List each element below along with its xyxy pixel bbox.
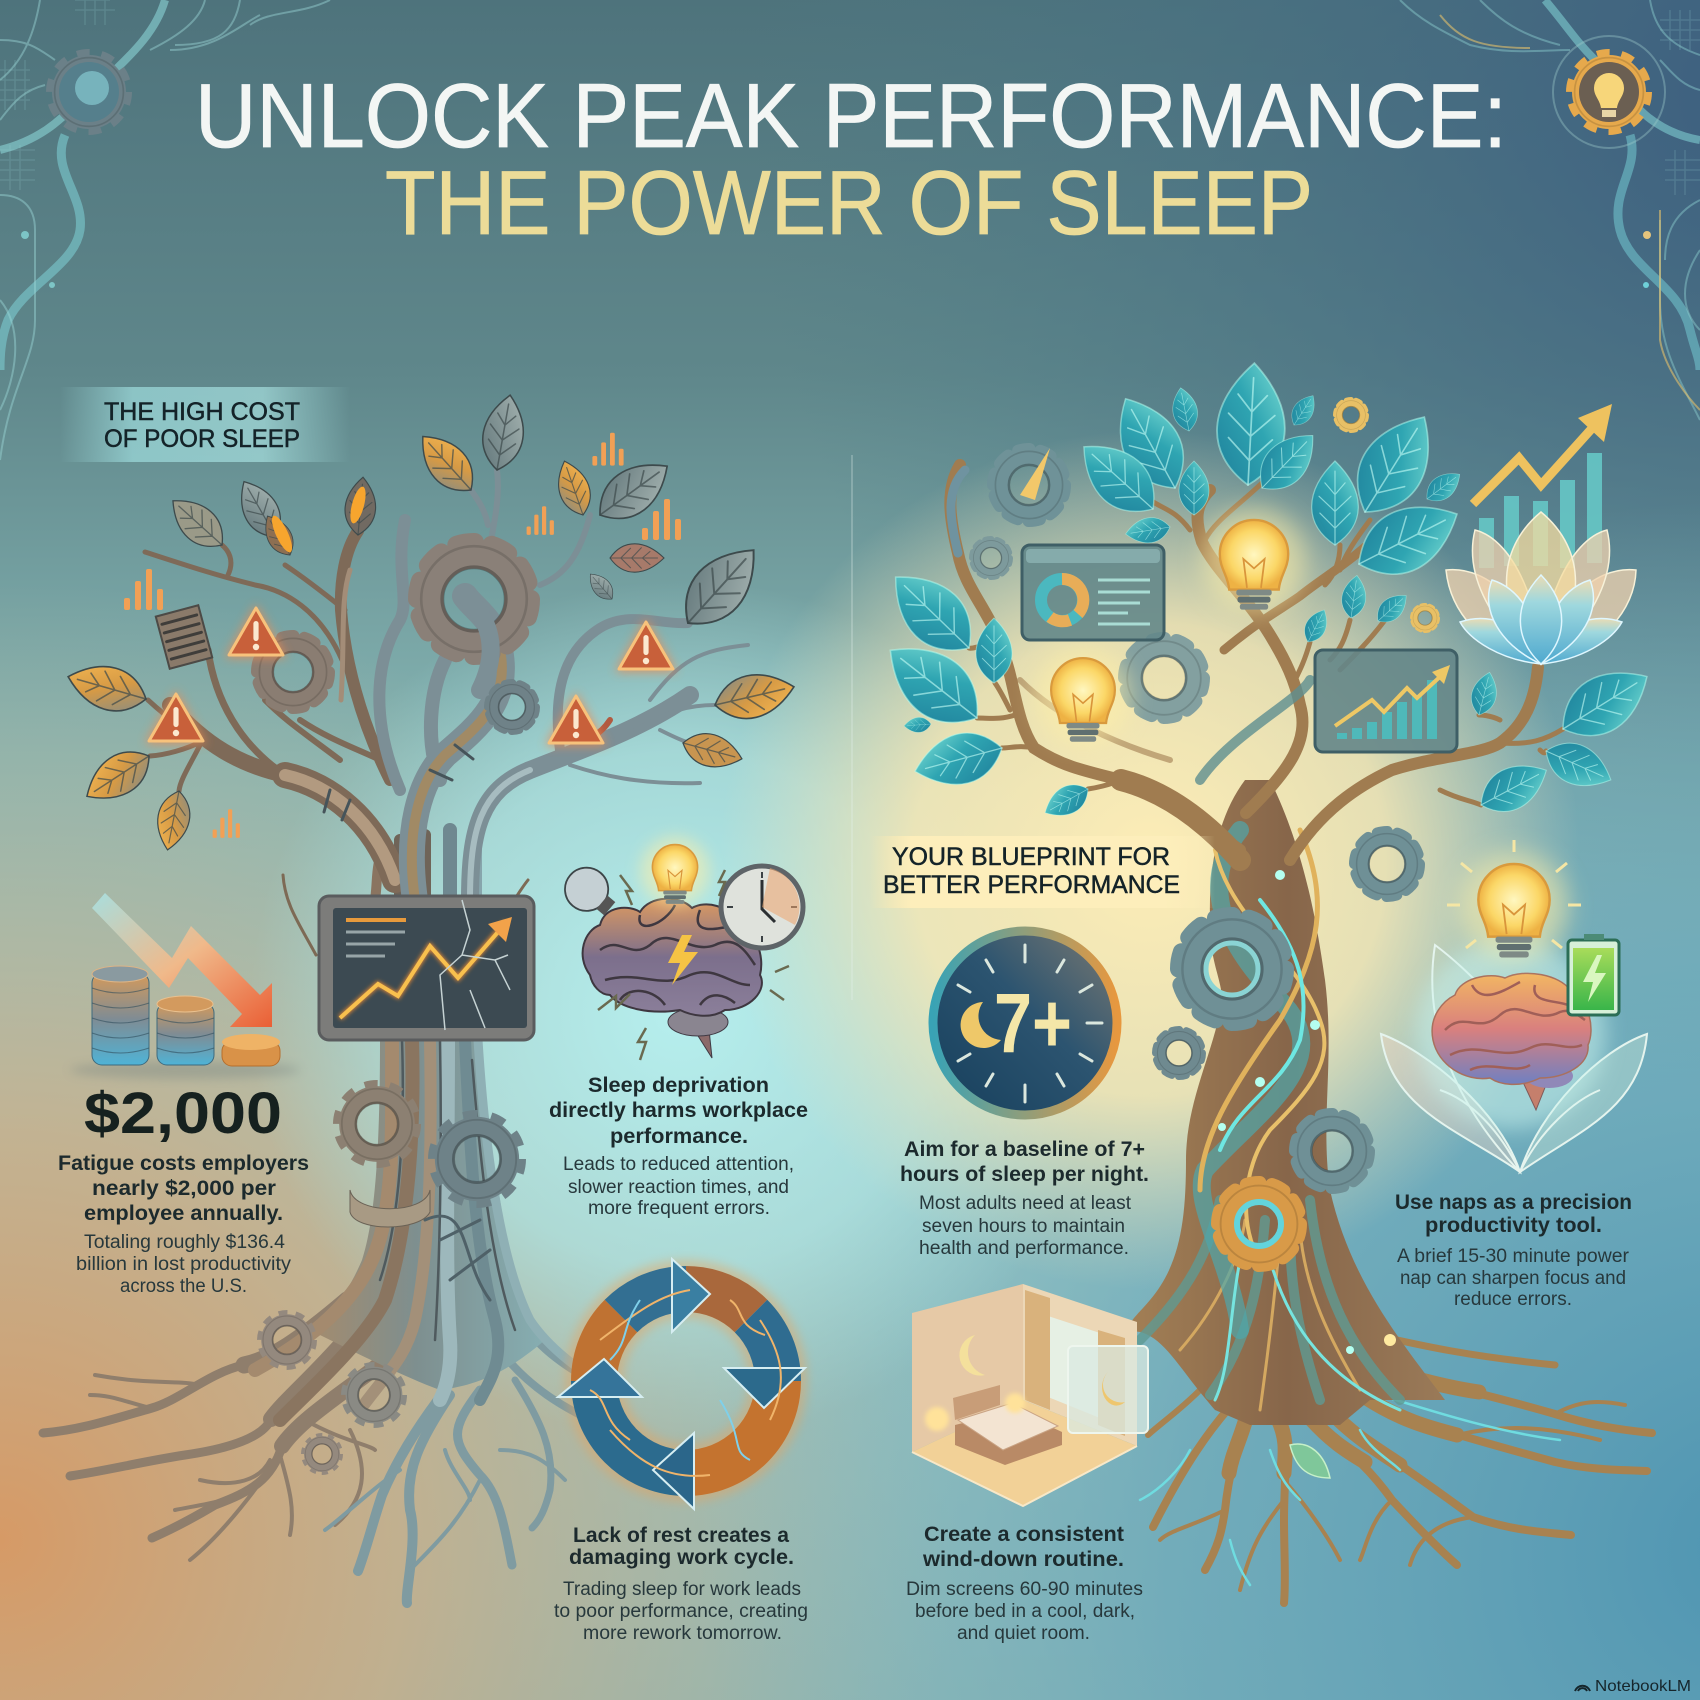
bulb <box>1447 840 1581 960</box>
branches: left tree <box>145 531 395 880</box>
warning icons <box>145 604 677 746</box>
glowing leaf at roots <box>1290 1444 1330 1478</box>
text block: sleep deprivation: more frequent errors. <box>588 1198 770 1219</box>
text block: naps: Use naps as a precision <box>1395 1191 1632 1214</box>
text block: sleep deprivation: Leads to reduced attention, <box>563 1154 794 1175</box>
text block: sleep deprivation: slower reaction times, and <box>568 1177 789 1198</box>
coin stacks <box>92 966 280 1066</box>
text block: $2,000 statistic: billion in lost productivity <box>76 1254 292 1275</box>
dashboard panel: donut <box>1022 545 1164 640</box>
text block: sleep deprivation: directly harms workplace <box>549 1099 808 1122</box>
chart panel: growth <box>1315 650 1457 752</box>
section banner: blueprint: BETTER PERFORMANCE <box>883 871 1180 899</box>
NotebookLM logo: NotebookLM <box>1595 1678 1691 1695</box>
corner decoration: top-left circuit vines <box>0 0 330 460</box>
leaves: left tree <box>62 392 799 853</box>
window and curtains <box>1048 1316 1100 1418</box>
text block: wind-down: Create a consistent <box>924 1523 1124 1546</box>
bar chart glyphs <box>124 433 681 838</box>
text block: $2,000 statistic: $2,000 <box>84 1081 282 1146</box>
text block: $2,000 statistic <box>58 1081 309 1297</box>
rising arrow <box>1473 425 1595 504</box>
text block: 7+ hours: hours of sleep per night. <box>900 1163 1149 1186</box>
bed <box>955 1410 1062 1465</box>
text block: work cycle <box>554 1524 808 1644</box>
battery <box>1568 934 1619 1015</box>
section banner: high cost: OF POOR SLEEP <box>104 425 300 453</box>
branches: right tree <box>950 465 1563 860</box>
title <box>195 66 1507 254</box>
icon: top-left gear <box>52 55 126 129</box>
text block: 7+ hours: health and performance. <box>919 1238 1129 1259</box>
text block: 7+ hours <box>900 1138 1149 1259</box>
gears: right tree <box>972 400 1438 1265</box>
icon: bedroom <box>912 1284 1148 1506</box>
title line 1: UNLOCK PEAK PERFORMANCE: <box>195 66 1507 167</box>
text block: wind-down <box>906 1523 1143 1644</box>
text block: work cycle: more rework tomorrow. <box>583 1623 782 1644</box>
text block: naps: reduce errors. <box>1454 1289 1572 1310</box>
icon: recharged brain with lotus <box>1381 840 1647 1172</box>
text block: $2,000 statistic: employee annually. <box>84 1202 283 1225</box>
monitor: cracked chart <box>319 896 534 1040</box>
trunk: left tree <box>310 1040 545 1390</box>
text block: 7+ hours: Most adults need at least <box>919 1193 1132 1214</box>
icon: top-right gold gear with bulb <box>1572 55 1646 129</box>
roots: right tree <box>1148 1327 1652 1603</box>
bright bulb <box>641 837 709 905</box>
text block: $2,000 statistic: Fatigue costs employers <box>58 1152 309 1175</box>
icon: tired brain with bulbs and clock <box>556 837 803 1060</box>
glowing strands <box>1200 830 1400 1410</box>
translucent petals <box>1381 945 1647 1172</box>
text block: sleep deprivation: Sleep deprivation <box>588 1074 769 1097</box>
text block: work cycle: Lack of rest creates a <box>573 1524 789 1547</box>
roots: left tree <box>43 1300 379 1560</box>
trunk: right tree <box>1129 780 1445 1425</box>
text block: work cycle: damaging work cycle. <box>569 1546 794 1569</box>
icon: lotus with rising bar chart <box>1446 404 1636 664</box>
falling arrow <box>92 893 272 1027</box>
section banner: high cost: THE HIGH COST <box>104 398 300 426</box>
text block: sleep deprivation <box>549 1074 808 1219</box>
text block: work cycle: Trading sleep for work leads <box>563 1579 801 1600</box>
bulbs: right tree <box>1035 508 1306 744</box>
text block: 7+ hours: Aim for a baseline of 7+ <box>904 1138 1145 1161</box>
text block: $2,000 statistic: nearly $2,000 per <box>92 1177 276 1200</box>
lotus petals <box>1446 512 1636 664</box>
trunk strands: left tree <box>255 1040 610 1420</box>
broken document icon <box>156 605 212 669</box>
text block: naps: A brief 15-30 minute power <box>1397 1246 1630 1267</box>
text block: naps: productivity tool. <box>1425 1214 1602 1237</box>
text block: naps: nap can sharpen focus and <box>1400 1268 1626 1289</box>
section banner: high cost <box>60 387 350 462</box>
text block: wind-down: Dim screens 60-90 minutes <box>906 1579 1143 1600</box>
text block: work cycle: to poor performance, creating <box>554 1601 808 1622</box>
section banner: blueprint: YOUR BLUEPRINT FOR <box>892 843 1170 871</box>
icon: damaging work cycle <box>558 1259 805 1509</box>
glass screen <box>1068 1346 1148 1433</box>
gears: left tree crown <box>257 542 536 731</box>
icon: 7+ hours clock <box>933 931 1117 1115</box>
text block: $2,000 statistic: Totaling roughly $136.4 <box>84 1232 285 1253</box>
text block: sleep deprivation: performance. <box>610 1125 748 1148</box>
section banner: blueprint <box>870 836 1215 908</box>
clock <box>721 866 803 948</box>
corner decoration: top-right circuit vines <box>1400 0 1700 420</box>
icon: falling coins and arrow <box>70 893 300 1079</box>
trunk top: left tree <box>283 830 528 955</box>
title line 2: THE POWER OF SLEEP <box>385 153 1313 254</box>
text block: wind-down: before bed in a cool, dark, <box>915 1601 1135 1622</box>
text block: $2,000 statistic: across the U.S. <box>120 1276 247 1297</box>
text block: 7+ hours: seven hours to maintain <box>922 1216 1125 1237</box>
text block: naps <box>1395 1191 1632 1310</box>
left tree: decaying tree <box>43 392 799 1603</box>
gears on left trunk <box>261 1086 519 1472</box>
wall moon <box>959 1335 985 1376</box>
bars behind lotus <box>1479 453 1602 568</box>
text block: wind-down: wind-down routine. <box>922 1548 1124 1571</box>
leaves: right tree <box>872 361 1662 825</box>
icon: 7+ hours clock: 7+ <box>994 976 1072 1070</box>
text block: wind-down: and quiet room. <box>957 1623 1090 1644</box>
right tree: flourishing tree <box>872 361 1662 1603</box>
dim bulb <box>556 859 624 925</box>
